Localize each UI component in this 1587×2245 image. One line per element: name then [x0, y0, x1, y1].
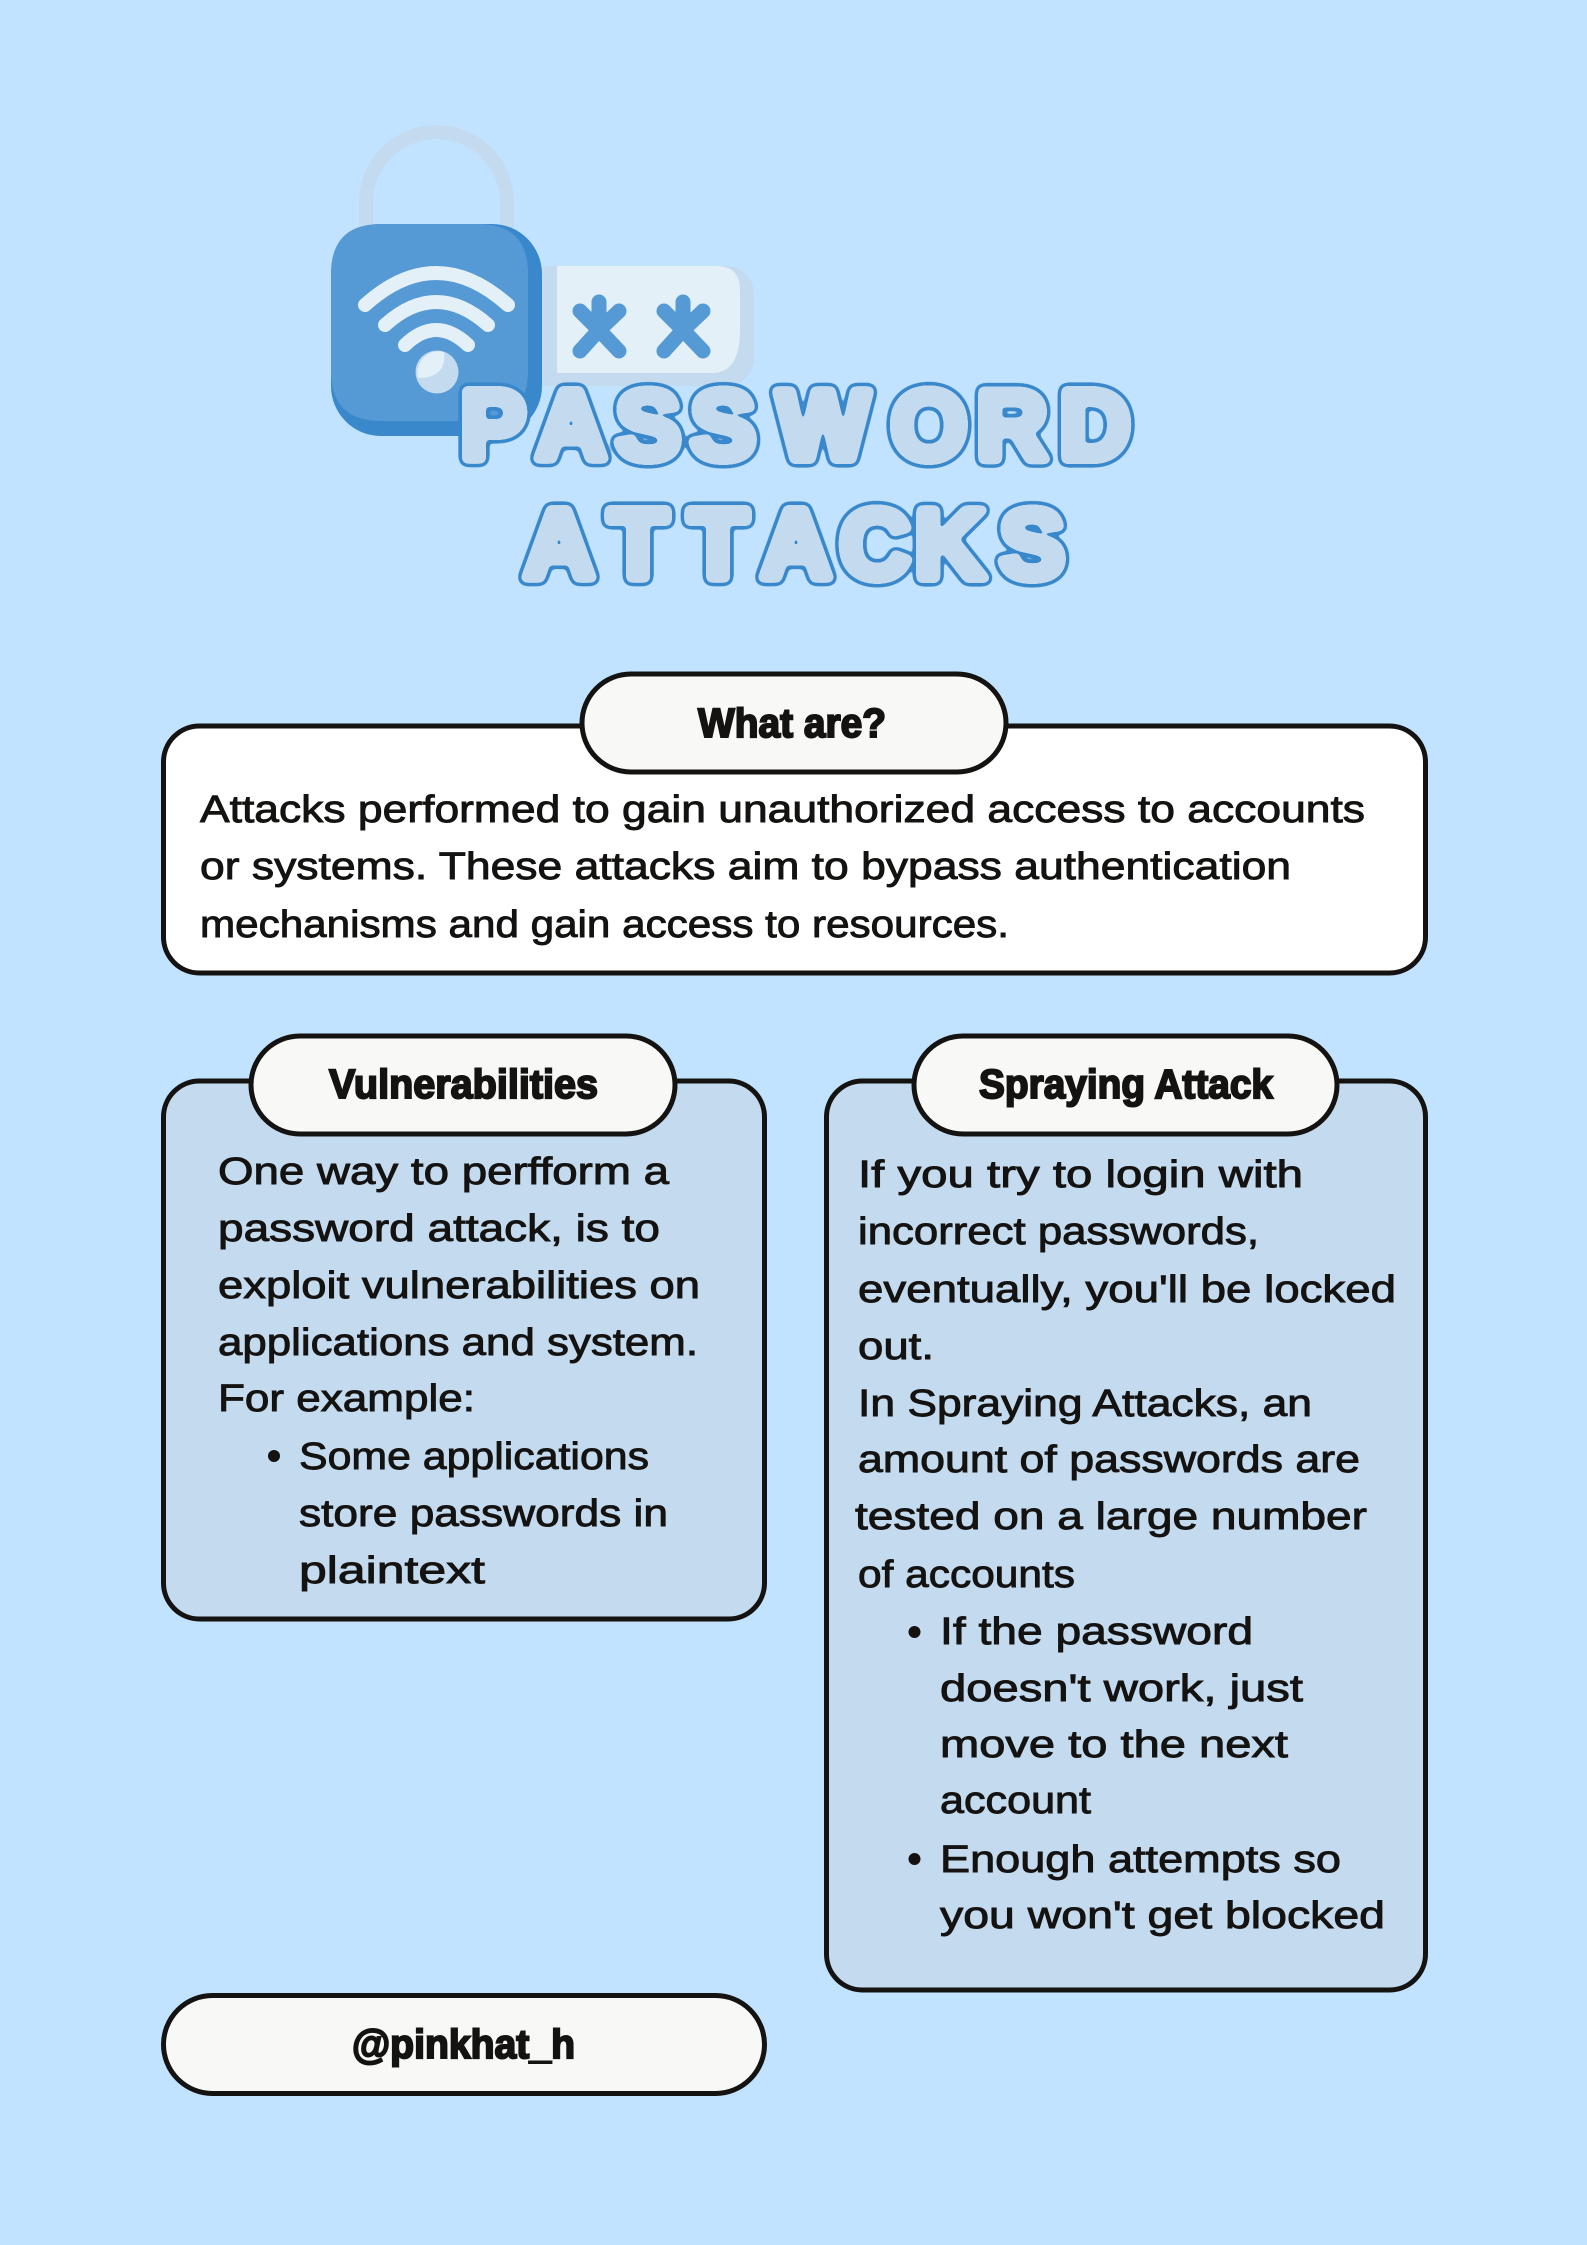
- body text: exploit vulnerabilities on: [218, 1265, 700, 1307]
- title: PASSWORD: [460, 370, 1130, 480]
- body text: tested on a large number: [855, 1496, 1367, 1538]
- bullet list: account: [940, 1780, 1092, 1822]
- icon: wifi symbol: [365, 273, 508, 394]
- handle pill: @pinkhat_h: [352, 2021, 575, 2067]
- bullet list: doesn't work, just: [940, 1668, 1304, 1710]
- bullet list: you won't get blocked: [940, 1895, 1385, 1937]
- heading pill: vulnerabilities: Vulnerabilities: [329, 1061, 598, 1107]
- icon: padlock body: [331, 224, 542, 436]
- body text: If you try to login with: [858, 1154, 1303, 1196]
- bullet list: store passwords in: [299, 1493, 668, 1535]
- body text: amount of passwords are: [858, 1439, 1360, 1481]
- panel box: [164, 1081, 764, 1619]
- panel: spraying attack: [826, 1036, 1426, 1990]
- body text: [200, 789, 1365, 946]
- handle pill: [164, 1996, 764, 2094]
- bullet list: [908, 1611, 1385, 1937]
- title: ATTACKS: [524, 489, 1065, 599]
- body text: password attack, is to: [218, 1208, 660, 1250]
- heading pill: what are: [582, 674, 1006, 772]
- bullet list: [268, 1436, 668, 1592]
- body text: mechanisms and gain access to resources.: [200, 904, 1009, 946]
- body text: of accounts: [858, 1554, 1075, 1596]
- body text: incorrect passwords,: [858, 1211, 1259, 1253]
- heading pill: what are: What are?: [698, 700, 886, 746]
- heading pill: spraying attack: [914, 1036, 1337, 1134]
- body text: eventually, you'll be locked: [858, 1269, 1396, 1311]
- heading pill: vulnerabilities: [251, 1036, 675, 1134]
- panel box: [826, 1081, 1426, 1990]
- body text: [218, 1151, 700, 1420]
- body text: In Spraying Attacks, an: [858, 1383, 1312, 1425]
- icon: padlock with wifi and password field: [331, 132, 754, 436]
- body text: [855, 1154, 1396, 1596]
- bullet list: plaintext: [299, 1550, 486, 1592]
- panel box: [164, 726, 1426, 973]
- title: [460, 370, 1130, 599]
- body text: applications and system.: [218, 1322, 698, 1364]
- body text: or systems. These attacks aim to bypass authentication: [200, 846, 1291, 888]
- body text: One way to perfform a: [218, 1151, 670, 1193]
- bullet list: move to the next: [940, 1724, 1289, 1766]
- bullet list: Some applications: [299, 1436, 649, 1478]
- body text: Attacks performed to gain unauthorized access to accounts: [200, 789, 1365, 831]
- panel: vulnerabilities: [164, 1036, 764, 1619]
- bullet list: If the password: [940, 1611, 1253, 1653]
- panel: what are: [164, 674, 1426, 973]
- icon: padlock shackle: [366, 132, 507, 235]
- body text: For example:: [218, 1378, 475, 1420]
- bullet list: Enough attempts so: [940, 1839, 1341, 1881]
- heading pill: spraying attack: Spraying Attack: [979, 1061, 1273, 1107]
- body text: out.: [858, 1326, 934, 1368]
- icon: password field: [520, 266, 754, 386]
